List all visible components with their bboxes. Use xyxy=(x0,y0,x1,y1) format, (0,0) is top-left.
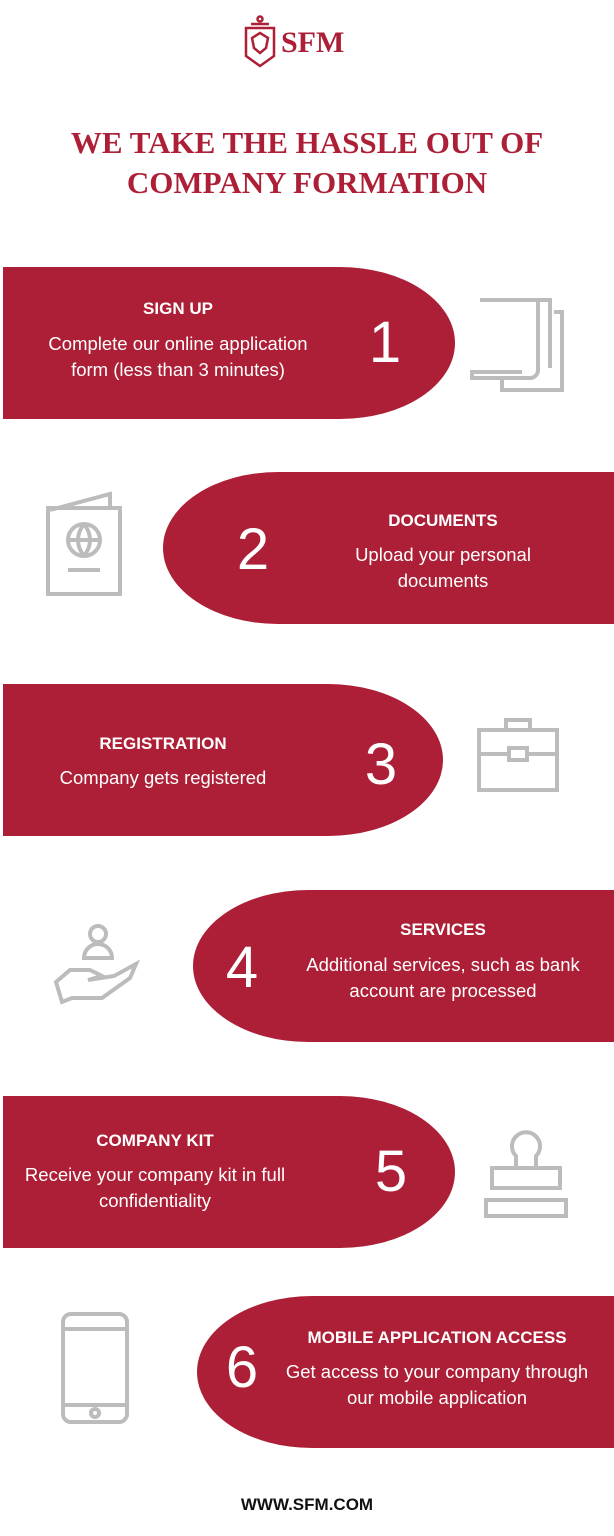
icon: stamp xyxy=(484,1130,568,1218)
title xyxy=(71,125,543,200)
panel: step 6: 6 xyxy=(226,1335,258,1400)
logo: SFM xyxy=(281,26,344,59)
panel: step 5: 5 xyxy=(375,1139,407,1204)
panel: step 6: Get access to your company through xyxy=(286,1361,588,1382)
icon: passport xyxy=(46,492,122,596)
panel: step 1: 1 xyxy=(369,310,401,375)
panel: step 6: our mobile application xyxy=(347,1387,527,1408)
panel: step 4: Additional services, such as bank xyxy=(306,954,580,975)
panel: step 5 xyxy=(3,1096,455,1248)
panel: step 2: 2 xyxy=(237,517,269,582)
panel: step 3: 3 xyxy=(365,732,397,797)
footer url: WWW.SFM.COM xyxy=(241,1495,373,1514)
title: WE TAKE THE HASSLE OUT OF xyxy=(71,125,543,160)
icon: briefcase xyxy=(477,718,559,792)
panel: step 5: Receive your company kit in full xyxy=(25,1164,285,1185)
panel: step 2: DOCUMENTS xyxy=(388,511,498,530)
panel: step 3: Company gets registered xyxy=(60,767,266,788)
panel: step 3: REGISTRATION xyxy=(99,734,227,753)
panel: step 6 xyxy=(197,1296,614,1448)
icon: documents xyxy=(470,298,564,392)
title: COMPANY FORMATION xyxy=(127,165,487,200)
panel: step 2 xyxy=(163,472,614,624)
panel: step 4: 4 xyxy=(226,935,258,1000)
panel: step 3 xyxy=(3,684,443,836)
panel: step 4: account are processed xyxy=(349,980,537,1001)
panel: step 1: Complete our online application xyxy=(48,333,308,354)
panel: step 4 xyxy=(193,890,614,1042)
panel: step 5: confidentiality xyxy=(99,1190,211,1211)
panel: step 5: COMPANY KIT xyxy=(96,1131,214,1150)
panel: step 2: documents xyxy=(398,570,488,591)
panel: step 1: form (less than 3 minutes) xyxy=(71,359,285,380)
panel: step 6: MOBILE APPLICATION ACCESS xyxy=(307,1328,567,1347)
panel: step 1: SIGN UP xyxy=(143,299,213,318)
panel: step 1 xyxy=(3,267,455,419)
icon: hand with person xyxy=(54,924,140,1004)
icon: phone xyxy=(61,1312,129,1424)
logo xyxy=(244,15,344,68)
panel: step 4: SERVICES xyxy=(400,920,486,939)
panel: step 2: Upload your personal xyxy=(355,544,531,565)
